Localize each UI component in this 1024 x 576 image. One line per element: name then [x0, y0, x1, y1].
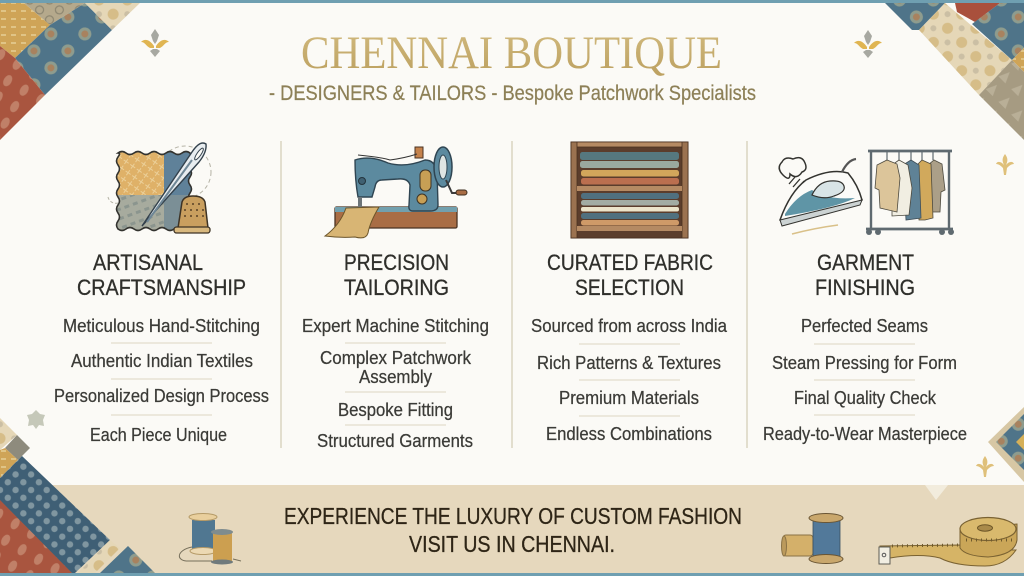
icon: thread spools left: [179, 514, 241, 564]
feature list: Bespoke Fitting: [338, 400, 453, 420]
heading: PRECISION: [344, 250, 449, 275]
bottom teal band: [0, 573, 1024, 576]
icon: steam iron: [779, 158, 862, 234]
panel: precision tailoring: [302, 147, 489, 451]
feature list: [54, 316, 269, 445]
patchwork corner: top left: [0, 3, 140, 140]
icon: sewing machine: [325, 147, 467, 238]
feature list: Final Quality Check: [794, 388, 937, 408]
patchwork corner: bottom left: [0, 418, 155, 573]
icon: measuring tape: [879, 518, 1017, 566]
feature list: [763, 316, 967, 444]
footer notch: [925, 485, 948, 500]
footer call to action: [284, 503, 742, 557]
panel: garment finishing: [763, 151, 967, 444]
ornament: top right: [854, 30, 882, 58]
heading: SELECTION: [575, 275, 684, 300]
patchwork corner: top right: [885, 3, 1024, 140]
feature list: Assembly: [359, 367, 432, 387]
feature list: Authentic Indian Textiles: [71, 351, 253, 371]
heading: [547, 250, 713, 300]
heading: CURATED FABRIC: [547, 250, 713, 275]
feature list: Structured Garments: [317, 431, 473, 451]
heading: GARMENT: [817, 250, 914, 275]
icon: patchwork, needle and thimble: [108, 143, 211, 235]
feature list: Endless Combinations: [546, 424, 712, 444]
feature list: Rich Patterns & Textures: [537, 353, 721, 373]
icon: thread spools right: [782, 514, 843, 564]
heading: ARTISANAL: [93, 250, 203, 275]
feature list: Sourced from across India: [531, 316, 728, 336]
feature list: Expert Machine Stitching: [302, 316, 489, 336]
icon: fabric shelf: [571, 142, 688, 238]
feature list: Personalized Design Process: [54, 386, 269, 406]
column dividers: [281, 141, 747, 448]
footer call to action: EXPERIENCE THE LUXURY OF CUSTOM FASHION: [284, 503, 742, 529]
heading: TAILORING: [344, 275, 449, 300]
ornament: top left: [141, 29, 169, 57]
ornament: right fleur: [996, 154, 1014, 175]
feature list: Complex Patchwork: [320, 348, 472, 368]
feature list: [302, 316, 489, 451]
feature list: Each Piece Unique: [90, 425, 227, 445]
feature list: Meticulous Hand-Stitching: [63, 316, 260, 336]
ornament: lower left: [27, 410, 45, 429]
ornament: lower right fleur: [976, 456, 994, 477]
title: CHENNAI BOUTIQUE: [301, 27, 722, 79]
icon: garment rack: [866, 151, 954, 235]
footer banner background: [0, 485, 1024, 573]
feature list: Steam Pressing for Form: [772, 353, 957, 373]
heading: [815, 250, 915, 300]
patchwork corner: bottom right: [988, 407, 1024, 482]
footer call to action: VISIT US IN CHENNAI.: [409, 531, 615, 557]
heading: CRAFTSMANSHIP: [77, 275, 246, 300]
feature list: Premium Materials: [559, 388, 699, 408]
feature list: [531, 316, 728, 444]
panel: artisanal craftsmanship: [54, 143, 269, 445]
top teal band: [0, 0, 1024, 3]
feature list: Perfected Seams: [801, 316, 928, 336]
heading: [344, 250, 449, 300]
heading: [77, 250, 246, 300]
panel: curated fabric selection: [531, 142, 728, 444]
feature list: Ready-to-Wear Masterpiece: [763, 424, 967, 444]
heading: FINISHING: [815, 275, 915, 300]
subtitle: - DESIGNERS & TAILORS - Bespoke Patchwork Specialists: [269, 82, 756, 105]
